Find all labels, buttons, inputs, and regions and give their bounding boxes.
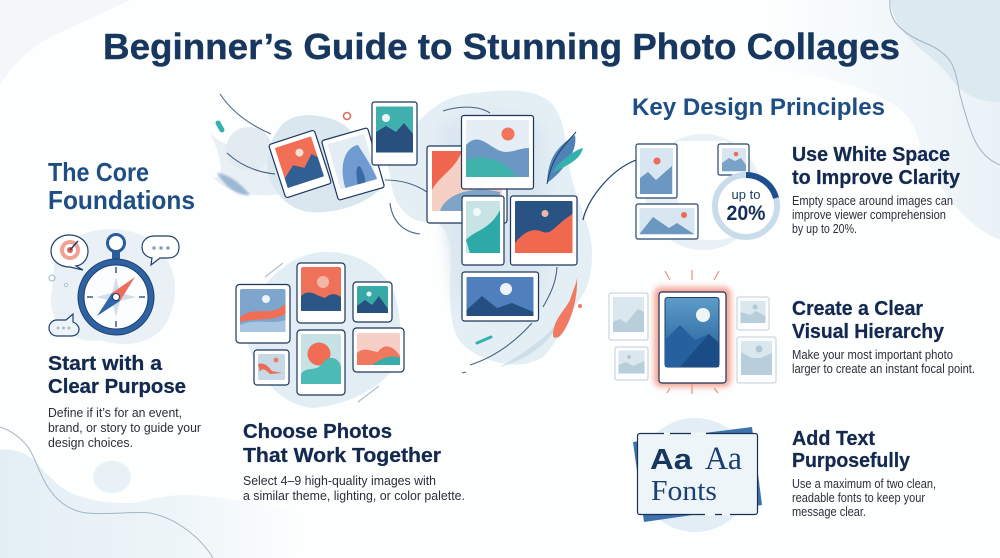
text: visual hierarchy: Visual Hierarchy bbox=[792, 321, 945, 343]
photo: coral circle and teal bbox=[297, 330, 345, 395]
bubble: dots left bbox=[49, 314, 79, 336]
photo: landscape mountain bbox=[636, 204, 698, 239]
photo: portrait mountain bbox=[636, 144, 677, 198]
text: start with a clear purpose bbox=[48, 353, 201, 450]
text: use white space: Use White Space bbox=[792, 144, 950, 166]
text: visual hierarchy: Create a Clear bbox=[792, 298, 923, 320]
text: visual hierarchy: larger to create an instant focal point. bbox=[792, 362, 975, 376]
photo: teal wave bbox=[462, 196, 504, 265]
photo: faded left bottom bbox=[615, 347, 648, 380]
bubble: dots right bbox=[142, 236, 179, 265]
photo: teal mountain bbox=[372, 102, 417, 165]
photo: blue waves with coral bbox=[236, 284, 290, 343]
photo: faded right bottom bbox=[737, 337, 776, 383]
text: use white space: improve viewer comprehension bbox=[792, 208, 946, 222]
icon: white space layout bbox=[636, 134, 777, 250]
photo: small mountain bbox=[718, 144, 749, 175]
text: add text purposefully: message clear. bbox=[792, 505, 866, 519]
heading: key design principles: Key Design Principles bbox=[632, 94, 885, 121]
text: use white space: Empty space around images can bbox=[792, 194, 953, 208]
donut: up to 20% bbox=[715, 175, 777, 237]
icon: compass with speech bubbles bbox=[49, 229, 179, 344]
photo: pink and teal hills bbox=[353, 328, 404, 372]
text: add text purposefully: readable fonts to keep your bbox=[792, 491, 925, 505]
photo: faded left top bbox=[609, 293, 648, 340]
font samples: Aa bbox=[650, 444, 693, 476]
heading: the core foundations: Foundations bbox=[48, 185, 195, 215]
lower collage blob bbox=[247, 252, 400, 408]
photo: faded right top bbox=[737, 297, 769, 330]
photo: coral swirl behind bbox=[427, 146, 507, 223]
text: use white space: to Improve Clarity bbox=[792, 167, 961, 189]
connector curve bbox=[583, 160, 636, 220]
font samples: Fonts bbox=[651, 475, 717, 507]
title: Beginner’s Guide to Stunning Photo Collages bbox=[103, 26, 900, 67]
icon: visual hierarchy bbox=[609, 270, 776, 394]
text: start with a clear purpose: Define if it’s for an event, bbox=[48, 406, 182, 420]
photo: coral sunset bbox=[297, 263, 345, 323]
photo: blue moon bbox=[462, 272, 538, 321]
text: choose photos: Choose Photos bbox=[243, 421, 392, 443]
heading: the core foundations: The Core bbox=[48, 157, 149, 187]
heading: the core foundations bbox=[48, 157, 195, 215]
text: choose photos: That Work Together bbox=[243, 445, 441, 467]
photo: tilted coral mountain bbox=[269, 130, 331, 198]
photo: small coral bird bbox=[254, 350, 289, 385]
text: start with a clear purpose: Clear Purpose bbox=[48, 376, 186, 398]
text: add text purposefully: Use a maximum of two clean, bbox=[792, 477, 936, 491]
text: add text purposefully bbox=[792, 428, 936, 519]
icon: feather bbox=[547, 132, 583, 184]
photo: blue and teal waves bbox=[462, 116, 534, 189]
text: start with a clear purpose: design choices. bbox=[48, 436, 133, 450]
text: use white space: by up to 20%. bbox=[792, 222, 857, 236]
icon: fonts card bbox=[633, 418, 762, 532]
main collage swooshes bbox=[210, 91, 592, 373]
bubble: target bbox=[51, 235, 88, 270]
text: start with a clear purpose: brand, or story to guide your bbox=[48, 421, 201, 435]
text: visual hierarchy bbox=[792, 298, 975, 376]
photo: tilted blue arch bbox=[321, 128, 385, 200]
text: add text purposefully: Purposefully bbox=[792, 450, 911, 472]
donut: up to 20%: up to bbox=[732, 187, 760, 202]
donut: up to 20%: 20% bbox=[726, 202, 766, 225]
text: add text purposefully: Add Text bbox=[792, 428, 875, 450]
text: start with a clear purpose: Start with a bbox=[48, 353, 163, 375]
font samples bbox=[650, 441, 742, 507]
text: choose photos: a similar theme, lighting, or color palette. bbox=[243, 489, 465, 503]
text: use white space bbox=[792, 144, 961, 236]
text: visual hierarchy: Make your most important photo bbox=[792, 348, 953, 362]
photo: navy and coral bbox=[510, 196, 577, 265]
text: choose photos: Select 4–9 high-quality images with bbox=[243, 474, 436, 488]
font samples: Aa bbox=[705, 441, 742, 477]
text: choose photos bbox=[243, 421, 465, 503]
photo: small teal mountain bbox=[353, 282, 392, 322]
